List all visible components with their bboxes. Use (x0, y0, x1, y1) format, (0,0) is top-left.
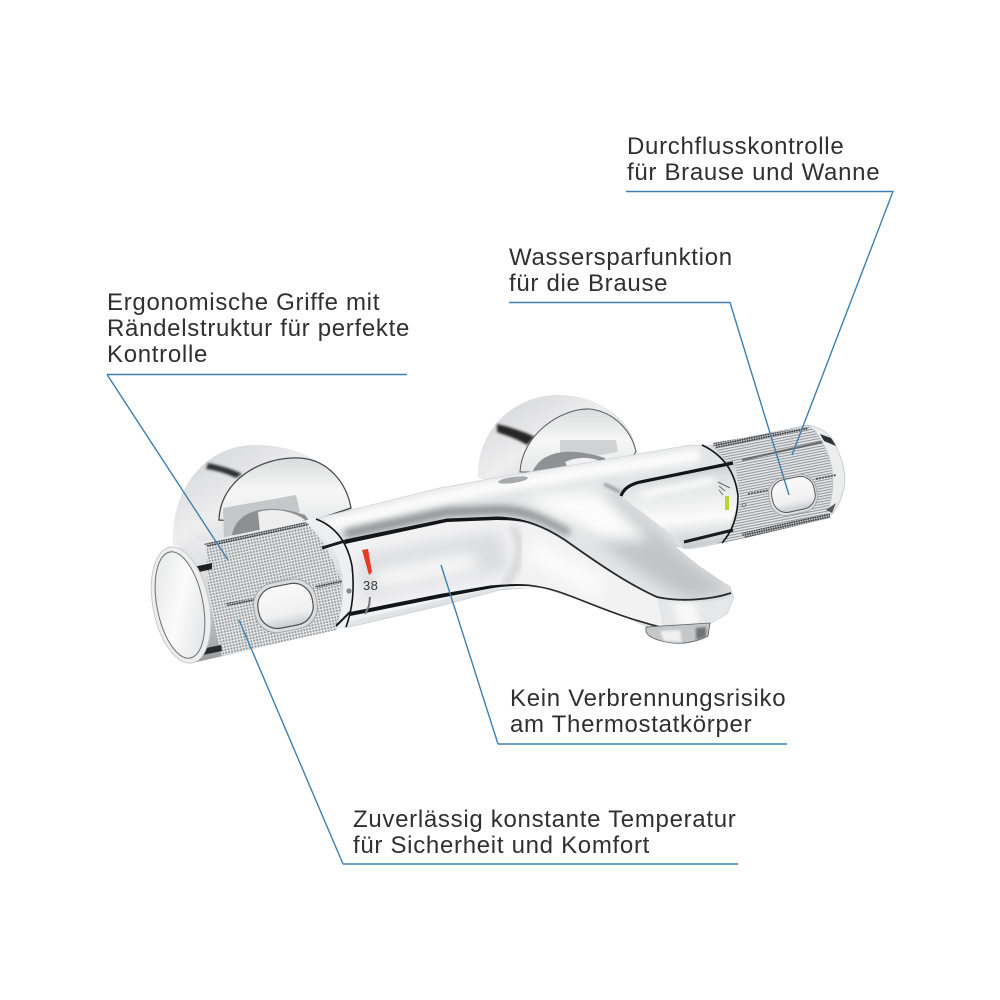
spout nose (698, 596, 734, 624)
logo (498, 475, 528, 485)
left handle: oval button (250, 575, 321, 636)
callout lines (107, 192, 893, 864)
top highlight (325, 455, 700, 526)
label: Kein Verbrennungsrisiko: Kein Verbrennungsrisiko (510, 685, 786, 712)
label: Durchflusskontrolle: Durchflusskontrolle (627, 133, 844, 160)
below lower dark line (345, 591, 650, 640)
right cylinder (622, 462, 740, 549)
label: Wassersparfunktion: für die Brause (509, 270, 668, 297)
label: Ergonomische Griffe: Rändelstruktur für perfekte (107, 315, 410, 342)
flow scale mark (718, 482, 746, 510)
label: Durchflusskontrolle: für Brause und Wanne (627, 159, 880, 186)
panel between dark lines (345, 520, 663, 627)
label: Zuverlässig konstante Temperatur: Zuverlässig konstante Temperatur (353, 806, 736, 833)
left handle: end cap (142, 542, 220, 668)
temperature scale: 38 (363, 578, 378, 593)
label: Wassersparfunktion: Wassersparfunktion (509, 244, 733, 271)
left handle: knurled grip (142, 518, 378, 668)
left handle: metal ring (305, 518, 354, 630)
label: Ergonomische Griffe: Kontrolle (107, 341, 208, 368)
temperature scale (346, 549, 378, 614)
shade above dark line (345, 510, 570, 534)
wall disk: right connector (478, 395, 636, 490)
thermostat body and spout (318, 445, 746, 643)
seam right (702, 445, 738, 543)
aerator (646, 623, 710, 643)
spout top surface (592, 489, 730, 601)
right handle: end ring (807, 425, 845, 516)
wall disk: left connector (173, 445, 351, 550)
label: Ergonomische Griffe: Ergonomische Griffe mit (107, 289, 380, 316)
right handle: knurled grip (700, 425, 845, 548)
label: Kein Verbrennungsrisiko: am Thermostatkörper (510, 711, 752, 738)
right handle: oval button (766, 471, 820, 519)
label: Zuverlässig konstante Temperatur: für Sicherheit und Komfort (353, 832, 650, 859)
dark reflection lines (345, 518, 731, 600)
